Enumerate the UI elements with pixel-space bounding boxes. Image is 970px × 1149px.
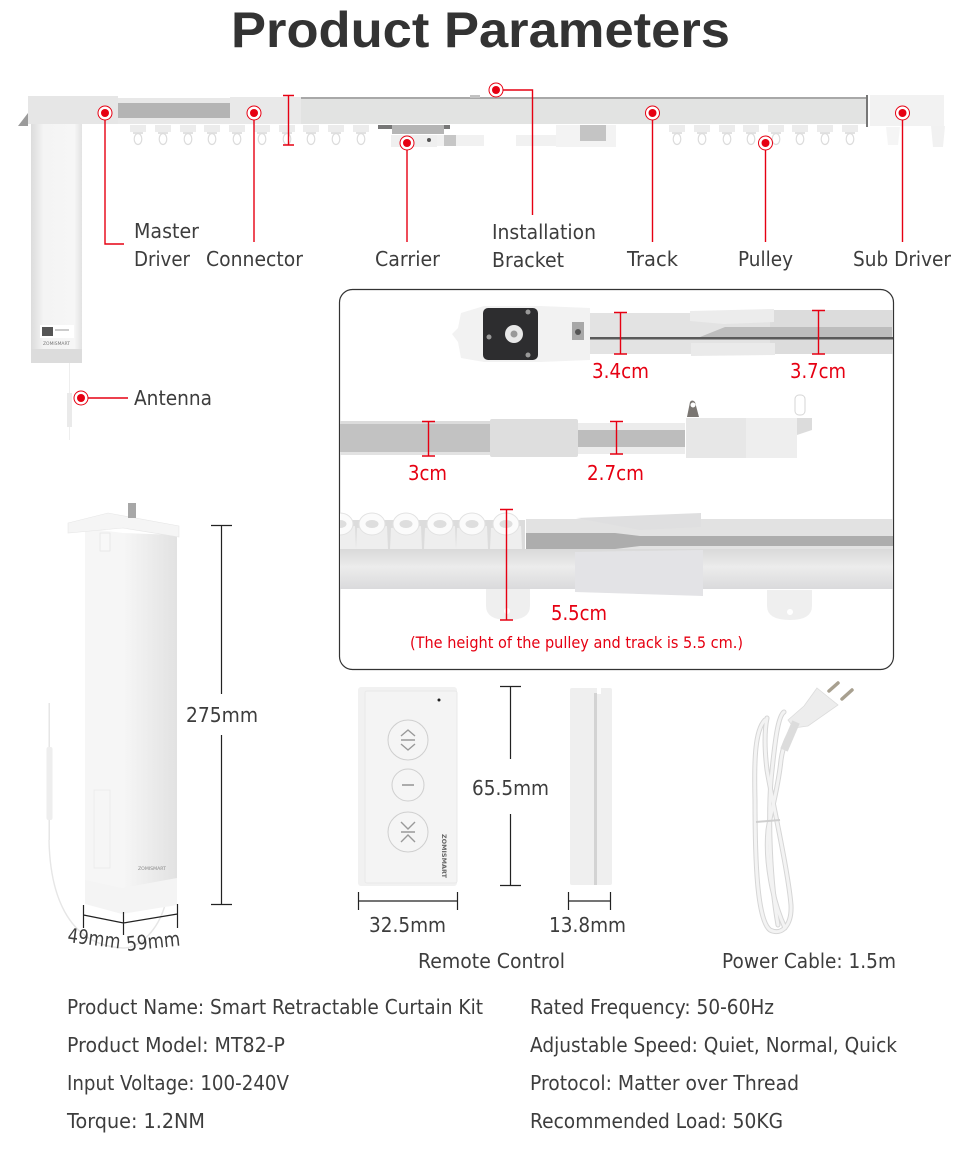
- callout: sub driver: [853, 106, 952, 271]
- dimension 3.4cm: 3.4cm: [592, 359, 649, 383]
- antenna cable: [49, 840, 165, 948]
- remote brand: ZOMISMART: [440, 834, 448, 879]
- power cable: [755, 683, 852, 932]
- callout: antenna: [67, 363, 212, 440]
- callout: master driver: [98, 106, 200, 271]
- dimension 49mm and 59mm: 49mm: [66, 923, 122, 953]
- dimension 65.5mm: [472, 686, 549, 886]
- callout: installation bracket: Bracket: [492, 248, 564, 272]
- motor product view: [46, 503, 258, 956]
- dimension 13.8mm: 13.8mm: [549, 913, 626, 937]
- callout: master driver: Driver: [134, 247, 191, 271]
- antenna: [46, 703, 52, 840]
- callout: sub driver: Sub Driver: [853, 247, 952, 271]
- right pulleys: [669, 125, 858, 144]
- connector sleeve: [230, 97, 301, 124]
- button: up and down: [388, 720, 428, 760]
- dimension 3.7cm: 3.7cm: [790, 359, 846, 383]
- specifications right column: Rated Frequency: 50-60Hz: [530, 995, 774, 1019]
- dimension 275mm: 275mm: [186, 703, 258, 727]
- title: Product Parameters: [231, 2, 730, 58]
- specifications right column: Adjustable Speed: Quiet, Normal, Quick: [530, 1033, 897, 1057]
- callout: connector: [206, 106, 304, 271]
- motor body: [68, 503, 179, 914]
- callout: pulley: [738, 136, 793, 271]
- dimension 49mm and 59mm: 59mm: [125, 926, 181, 956]
- dimension 5.5cm: 5.5cm: [551, 601, 607, 625]
- callout: track: [626, 106, 678, 271]
- callout: track: Track: [626, 247, 678, 271]
- specifications left column: Input Voltage: 100-240V: [67, 1071, 289, 1095]
- callout: installation bracket: [489, 83, 596, 272]
- plug: [784, 683, 852, 750]
- carrier: [378, 125, 484, 147]
- track height marker: [283, 96, 294, 145]
- remote control side: [570, 687, 612, 885]
- callout: installation bracket: Installation: [492, 220, 596, 244]
- label: remote control: Remote Control: [418, 949, 565, 973]
- callout: master driver: Master: [134, 219, 200, 243]
- open track section: [118, 98, 230, 124]
- callout: antenna: Antenna: [134, 386, 212, 410]
- callout: carrier: [375, 136, 441, 271]
- dimension 3.7cm: [790, 310, 846, 383]
- specifications right column: Protocol: Matter over Thread: [530, 1071, 799, 1095]
- dimension 3.4cm: [592, 312, 649, 383]
- button: open and close: [388, 812, 428, 852]
- dimension 3cm: [408, 422, 447, 485]
- end block track view: [340, 395, 812, 458]
- master driver: [18, 96, 118, 363]
- specifications left column: Torque: 1.2NM: [66, 1109, 205, 1133]
- remote control front: [358, 687, 457, 886]
- main track: [301, 95, 868, 127]
- dimension 32.5mm: [358, 892, 458, 937]
- dimension 2.7cm: [587, 422, 644, 485]
- dimension 32.5mm: 32.5mm: [369, 913, 446, 937]
- specifications left column: [66, 995, 483, 1133]
- button: stop: [392, 769, 424, 801]
- master driver: ZOMISMART: [43, 341, 71, 346]
- installation bracket: [470, 95, 616, 147]
- specifications right column: [530, 995, 897, 1133]
- specifications left column: Product Name: Smart Retractable Curtain Kit: [67, 995, 483, 1019]
- dimension 65.5mm: 65.5mm: [472, 776, 549, 800]
- dimension 5.5cm: [500, 510, 607, 625]
- specifications left column: Product Model: MT82-P: [67, 1033, 285, 1057]
- label: power cable: Power Cable: 1.5m: [722, 949, 896, 973]
- dimension 13.8mm: [549, 892, 626, 937]
- sub driver: [870, 95, 945, 147]
- pulley track view: [324, 513, 893, 620]
- carrier track view: [452, 306, 893, 362]
- left pulleys: [130, 125, 369, 144]
- callout: connector: Connector: [206, 247, 304, 271]
- specifications right column: Recommended Load: 50KG: [530, 1109, 783, 1133]
- dimension 275mm: [186, 526, 258, 904]
- dimension 2.7cm: 2.7cm: [587, 461, 644, 485]
- callout: pulley: Pulley: [738, 247, 793, 271]
- dimension 3cm: 3cm: [408, 461, 447, 485]
- motor body: ZOMISMART: [138, 866, 167, 871]
- curtain track assembly: [18, 95, 945, 363]
- panel: track dimensions: [324, 290, 894, 670]
- callout: carrier: Carrier: [375, 247, 441, 271]
- pulley height note: (The height of the pulley and track is 5.5 cm.): [410, 633, 743, 652]
- dimension 49mm and 59mm: [66, 904, 181, 956]
